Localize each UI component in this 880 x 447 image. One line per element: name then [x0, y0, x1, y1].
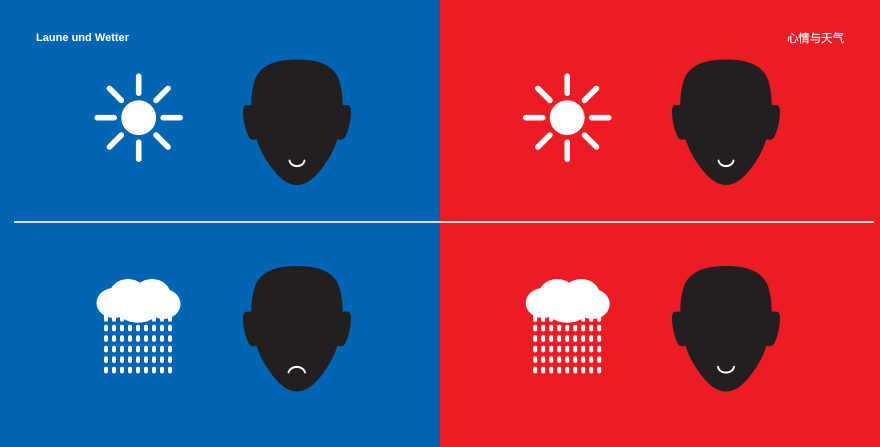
panel: blue background [0, 0, 440, 447]
heading: Laune und Wetter: Laune und Wetter [36, 32, 130, 44]
heading: Chinese title: 心情与天气 [787, 31, 844, 45]
head: sad on blue [243, 266, 351, 392]
icon: rain cloud on blue [96, 279, 180, 373]
icon: sun on blue [97, 76, 180, 159]
icon: rain cloud on red [526, 279, 610, 373]
panel: red background [440, 0, 880, 447]
head: happy on red [672, 60, 780, 185]
head: happy on red, rain [672, 266, 780, 392]
icon: sun on red [526, 76, 609, 159]
head: happy on blue [243, 60, 351, 185]
divider line [14, 221, 874, 223]
